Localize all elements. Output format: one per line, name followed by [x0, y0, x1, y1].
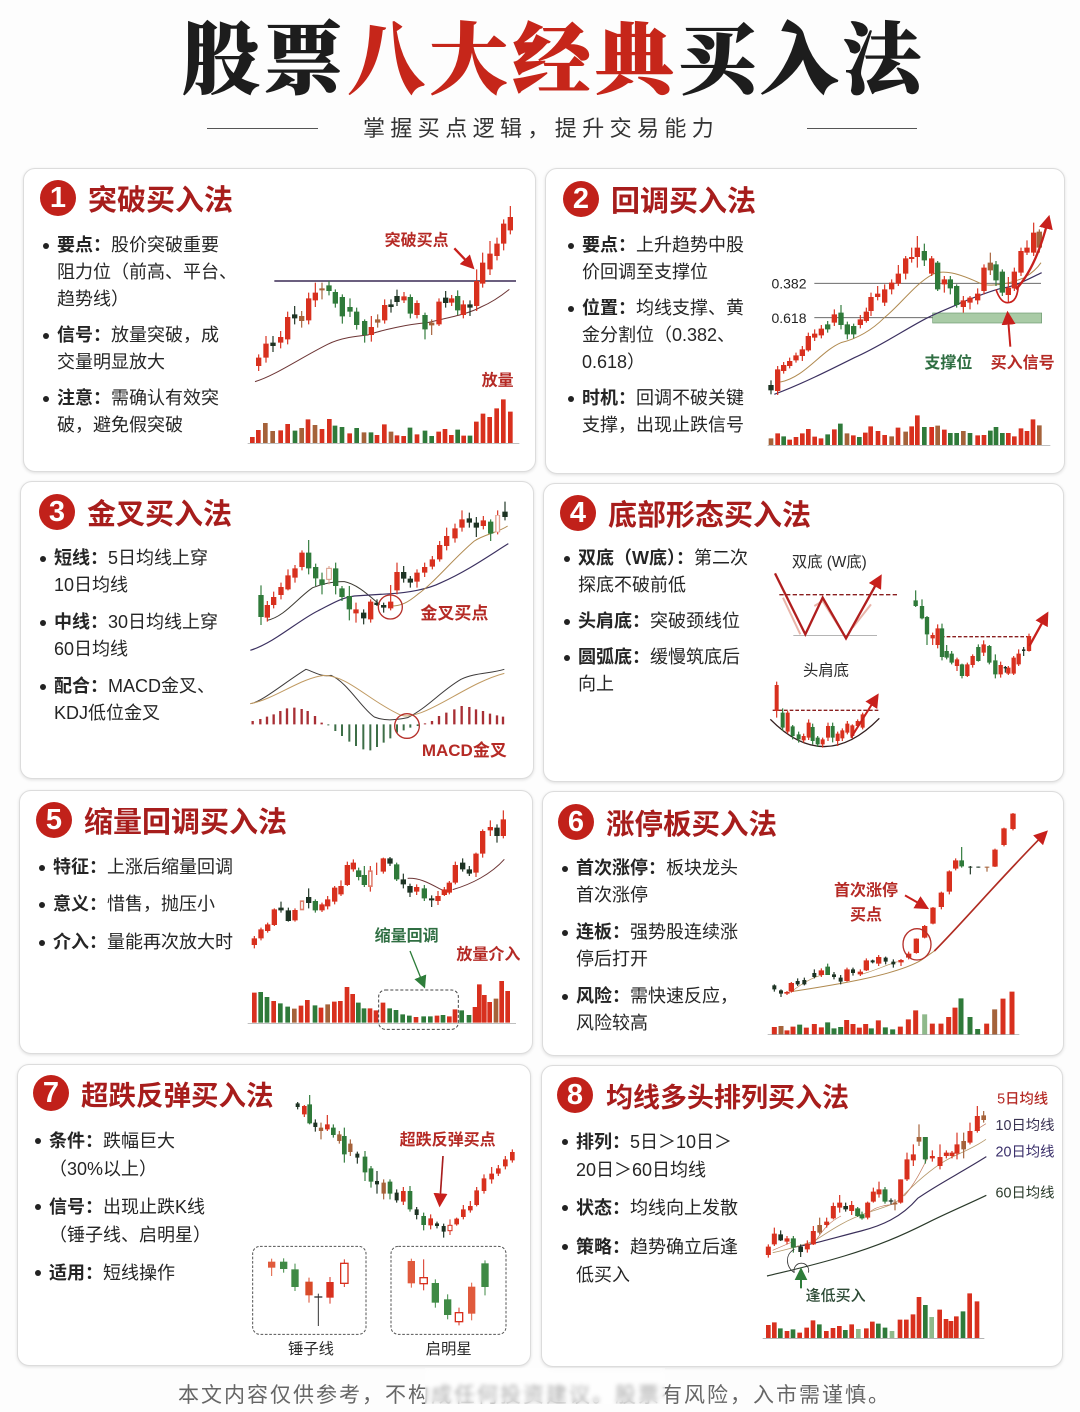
heading: 金叉买入法: [39, 494, 232, 531]
heading: 突破买入法: 1: [50, 182, 66, 214]
heading: 涨停板买入法: [558, 804, 777, 840]
panel: 6 涨停板买入法: [542, 791, 1064, 1056]
chart: 回调K线与黄金分割: [768, 215, 1055, 446]
chart: 涨停板K线与成交量: [768, 813, 1048, 1035]
heading: 均线多头排列买入法: 均线多头排列买入法: [606, 1082, 849, 1112]
heading: 缩量回调买入法: 5: [46, 804, 62, 836]
chart: 均线多头K线与成交量: 逢低买入: [806, 1286, 866, 1304]
heading: 回调买入法: [563, 181, 756, 218]
chart: 底部形态图示: [770, 554, 1048, 748]
heading: 均线多头排列买入法: 8: [567, 1079, 583, 1111]
text block: 底部形态要点: [564, 548, 748, 694]
legend: 均线标签: 20日均线: [996, 1144, 1054, 1161]
text block: 金叉要点: 中线：30日均线上穿: [54, 612, 218, 632]
text block: 缩量回调要点: 意义：惜售，抛压小: [53, 894, 215, 914]
chart: 回调K线与黄金分割: 买入信号: [991, 354, 1055, 372]
heading: 涨停板买入法: 6: [568, 806, 584, 838]
heading: 缩量回调买入法: [36, 802, 287, 839]
text block: 超跌反弹要点: 适用：短线操作: [49, 1263, 175, 1283]
text block: 超跌反弹要点: （锤子线、启明星）: [49, 1225, 211, 1245]
text block: 底部形态要点: 圆弧底：缓慢筑底后: [578, 647, 740, 667]
heading: 涨停板买入法: 涨停板买入法: [606, 808, 777, 840]
heading: 突破买入法: [40, 180, 233, 217]
text block: 回调要点: [568, 235, 744, 435]
text block: 超跌反弹要点: [35, 1131, 211, 1283]
chart: 金叉K线与MACD: MACD金叉: [422, 740, 507, 760]
chart: 突破K线与成交量: 放量: [482, 372, 514, 390]
chart: 突破K线与成交量: 突破买点: [385, 230, 449, 250]
chart: 突破K线与成交量: [248, 206, 520, 444]
text block: 突破要点: [43, 235, 237, 435]
heading: 底部形态买入法: 底部形态买入法: [608, 500, 811, 532]
text block: 底部形态要点: 头肩底：突破颈线位: [578, 611, 740, 631]
chart: 缩量回调K线与成交量: [248, 810, 520, 1030]
text block: 涨停板要点: 连板：强势股连续涨: [576, 922, 738, 942]
text block: 金叉要点: KDJ低位金叉: [54, 703, 160, 723]
chart: 金叉K线与MACD: 金叉买点: [420, 603, 488, 623]
heading: 回调买入法: 回调买入法: [611, 186, 756, 218]
text block: 均线多头要点: [562, 1132, 738, 1285]
text block: 回调要点: 0.618）: [582, 352, 645, 372]
text block: 超跌反弹要点: 条件：跌幅巨大: [49, 1131, 175, 1151]
text block: 回调要点: 支撑，出现止跌信号: [582, 415, 744, 435]
chart: 回调K线与黄金分割: 支撑位: [924, 353, 972, 372]
pattern box: 锤子线: 锤子线: [288, 1341, 334, 1358]
heading: 金叉买入法: 金叉买入法: [87, 499, 232, 531]
text block: 均线多头要点: 状态：均线向上发散: [576, 1198, 738, 1218]
chart: 超跌反弹K线与形态: 超跌反弹买点: [400, 1130, 496, 1149]
heading: 均线多头排列买入法: [557, 1077, 849, 1113]
text block: 突破要点: 阻力位（前高、平台、: [57, 262, 237, 282]
panel: 7 超跌反弹买入法: [17, 1064, 531, 1366]
text block: 突破要点: 要点：股价突破重要: [57, 235, 219, 255]
text block: 均线多头要点: 低买入: [576, 1265, 630, 1285]
title: 股票八大经典买入法: [182, 17, 925, 104]
text block: 缩量回调要点: 特征：上涨后缩量回调: [53, 857, 233, 877]
heading: 超跌反弹买入法: 超跌反弹买入法: [81, 1080, 274, 1111]
chart: 缩量回调K线与成交量: 缩量回调: [375, 926, 439, 945]
legend: 均线标签: 60日均线: [996, 1185, 1054, 1202]
footer disclaimer: 本文内容仅供参考，不构成任何投资建议。股票有风险，入市需谨慎。: [178, 1384, 891, 1407]
text block: 涨停板要点: 首次涨停: [576, 885, 648, 905]
chart: 缩量回调K线与成交量: 放量介入: [456, 946, 520, 964]
pattern box: 锤子线: [253, 1246, 366, 1358]
text block: 超跌反弹要点: 信号：出现止跌K线: [49, 1197, 205, 1217]
panel: 5 缩量回调买入法: [19, 790, 533, 1054]
chart: 涨停板K线与成交量: 买点: [850, 905, 882, 924]
panel: 4 底部形态买入法: [543, 483, 1064, 782]
chart: 回调K线与黄金分割: 0.618: [771, 310, 807, 326]
text block: 超跌反弹要点: （30%以上）: [49, 1159, 157, 1179]
text block: 均线多头要点: 20日＞60日均线: [576, 1160, 706, 1180]
text block: 金叉要点: [40, 548, 218, 723]
text block: 突破要点: 交量明显放大: [57, 352, 165, 372]
text block: 均线多头要点: 排列：5日＞10日＞: [576, 1132, 732, 1152]
text block: 金叉要点: 配合：MACD金叉、: [54, 676, 215, 696]
heading: 超跌反弹买入法: [33, 1075, 274, 1111]
heading: 底部形态买入法: [560, 495, 811, 532]
pattern box: 启明星: 启明星: [426, 1341, 472, 1358]
text block: 涨停板要点: 风险：需快速反应，: [576, 986, 738, 1006]
text block: 突破要点: 趋势线）: [57, 289, 129, 309]
text block: 回调要点: 位置：均线支撑、黄: [582, 298, 744, 318]
text block: 底部形态要点: 双底（W底）：第二次: [578, 548, 748, 568]
chart: 均线多头K线与成交量: [762, 1090, 1054, 1339]
heading: 金叉买入法: 3: [49, 496, 65, 528]
pattern box: 启明星: [391, 1246, 506, 1358]
panel: 3 金叉买入法: [20, 481, 534, 779]
text block: 缩量回调要点: [39, 857, 233, 952]
text block: 回调要点: 价回调至支撑位: [582, 262, 708, 282]
heading: 回调买入法: 2: [573, 183, 589, 215]
chart: 涨停板K线与成交量: 首次涨停: [834, 880, 898, 900]
heading: 超跌反弹买入法: 7: [43, 1077, 59, 1109]
text block: 回调要点: 金分割位（0.382、: [582, 325, 735, 345]
text block: 金叉要点: 60日均线: [54, 639, 128, 659]
heading: 底部形态买入法: 4: [570, 497, 586, 529]
text block: 涨停板要点: 首次涨停：板块龙头: [576, 858, 738, 878]
chart: 金叉K线与MACD: [250, 502, 509, 760]
chart: 底部形态图示: 双底 (W底): [792, 554, 867, 571]
legend: 均线标签: 5日均线: [997, 1090, 1048, 1107]
legend: 均线标签: 10日均线: [996, 1117, 1054, 1134]
text block: 涨停板要点: [562, 858, 738, 1033]
heading: 缩量回调买入法: 缩量回调买入法: [84, 807, 287, 839]
text block: 缩量回调要点: 介入：量能再次放大时: [53, 932, 233, 952]
text block: 突破要点: 破，避免假突破: [57, 415, 183, 435]
subtitle: 掌握买点逻辑，提升交易能力: [363, 116, 719, 141]
text block: 突破要点: 信号：放量突破，成: [57, 325, 219, 345]
text block: 金叉要点: 10日均线: [54, 575, 128, 595]
text block: 均线多头要点: 策略：趋势确立后逢: [576, 1237, 738, 1257]
text block: 突破要点: 注意：需确认有效突: [57, 388, 219, 408]
panel: 2 回调买入法: [545, 168, 1065, 474]
text block: 回调要点: 时机：回调不破关键: [582, 388, 744, 408]
chart: 超跌反弹K线与形态: [252, 1095, 515, 1358]
text block: 涨停板要点: 风险较高: [576, 1013, 648, 1033]
panel: 1 突破买入法: [23, 168, 536, 472]
panel: 8 均线多头排列买入法: [541, 1065, 1063, 1367]
text block: 金叉要点: 短线：5日均线上穿: [54, 548, 208, 568]
text block: 回调要点: 要点：上升趋势中股: [582, 235, 744, 255]
chart: 底部形态图示: 头肩底: [803, 662, 849, 680]
legend: 均线标签: [996, 1090, 1054, 1202]
heading: 突破买入法: 突破买入法: [88, 185, 233, 217]
chart: 回调K线与黄金分割: 0.382: [771, 276, 807, 292]
text block: 涨停板要点: 停后打开: [576, 949, 648, 969]
text block: 底部形态要点: 向上: [578, 674, 614, 694]
text block: 底部形态要点: 探底不破前低: [578, 575, 686, 595]
